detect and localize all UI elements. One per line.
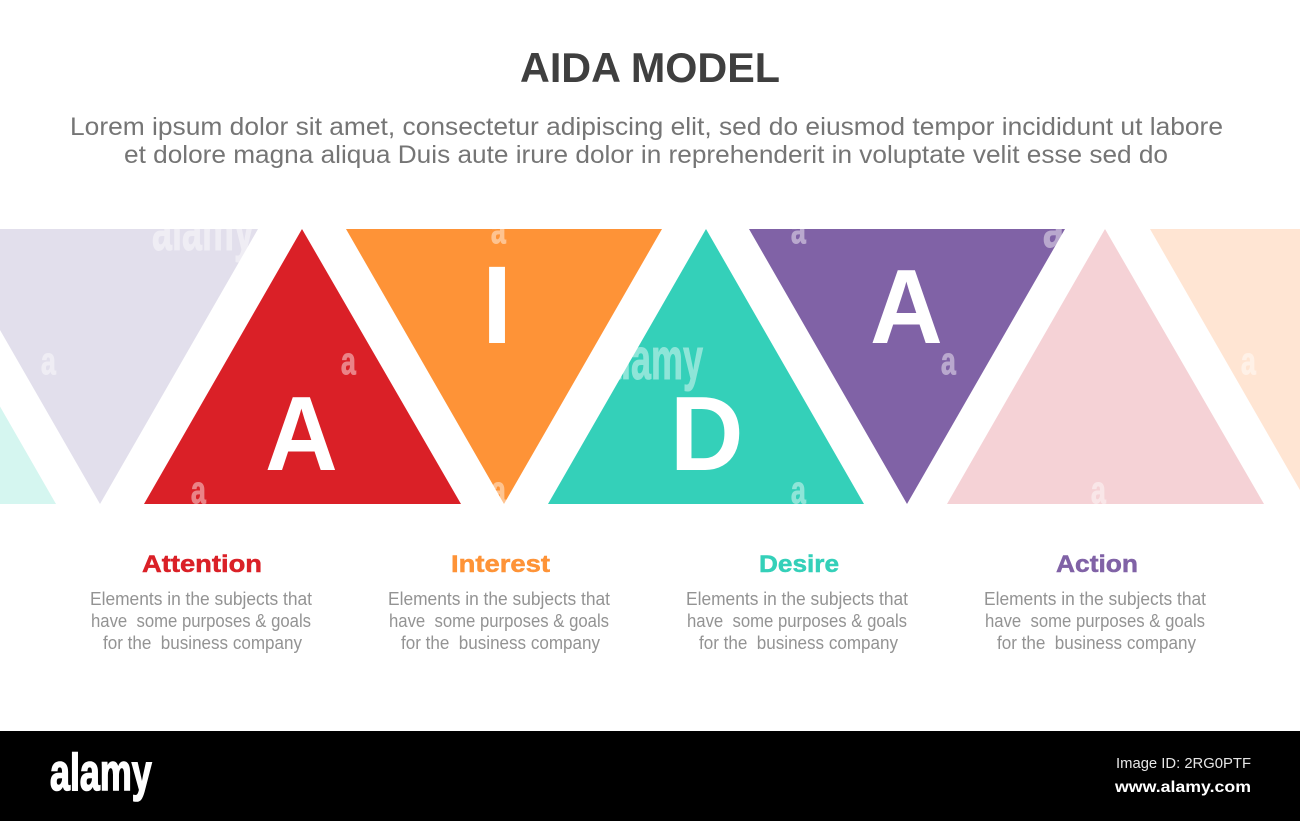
triangle: Attention letter A: [144, 229, 461, 504]
footer logo: alamy: [50, 745, 152, 802]
description: Attention: for the business company: [103, 633, 302, 653]
watermarks: a: [941, 339, 956, 382]
watermarks: a: [791, 208, 806, 251]
watermarks: a: [491, 468, 506, 511]
title: AIDA MODEL: [520, 44, 780, 91]
description: Desire: [686, 589, 908, 653]
watermarks: a: [1091, 468, 1106, 511]
triangle: Action letter A: [749, 229, 1065, 504]
footer bar: [0, 731, 1300, 821]
heading: Desire: Desire: [759, 551, 839, 578]
description: Action: have some purposes & goals: [985, 611, 1205, 631]
heading: Interest: Interest: [451, 551, 550, 578]
column: Attention: [90, 551, 312, 653]
description: Attention: [90, 589, 312, 653]
watermarks: a: [1043, 203, 1064, 258]
watermarks: a: [191, 468, 206, 511]
triangle: Action letter A: A: [870, 247, 943, 366]
triangle band: [0, 229, 1300, 504]
triangle: Desire letter D: D: [670, 375, 743, 493]
description: Interest: [388, 589, 610, 653]
description: Action: [984, 589, 1206, 653]
watermarks: alamy: [152, 198, 254, 263]
description: Desire: Elements in the subjects that: [686, 589, 908, 609]
intro text: [70, 113, 1223, 169]
column: Action: [984, 551, 1206, 653]
heading: Attention: Attention: [142, 551, 262, 578]
faded teal triangle: [0, 229, 56, 504]
website: www.alamy.com: [1114, 779, 1251, 796]
watermarks: a: [341, 339, 356, 382]
description: Action: Elements in the subjects that: [984, 589, 1206, 609]
column: Desire: [686, 551, 908, 653]
watermarks: a: [491, 208, 506, 251]
faded pink triangle: [947, 229, 1264, 504]
description: Interest: for the business company: [401, 633, 600, 653]
watermarks: a: [791, 468, 806, 511]
faded lavender triangle: [0, 229, 258, 504]
triangle: Attention letter A: A: [265, 374, 338, 493]
heading: Action: Action: [1056, 551, 1138, 578]
triangle: Interest letter I: I: [482, 244, 512, 367]
description: Desire: have some purposes & goals: [687, 611, 907, 631]
description: Attention: Elements in the subjects that: [90, 589, 312, 609]
intro text: et dolore magna aliqua Duis aute irure dolor in reprehenderit in voluptate velit esse sed do: [124, 141, 1168, 169]
watermarks: a: [41, 339, 56, 382]
description: Desire: for the business company: [699, 633, 898, 653]
watermarks: alamy: [601, 327, 703, 392]
description: Action: for the business company: [997, 633, 1196, 653]
faded peach triangle: [1150, 229, 1300, 504]
image id: Image ID: 2RG0PTF: [1116, 755, 1251, 772]
intro text: Lorem ipsum dolor sit amet, consectetur adipiscing elit, sed do eiusmod tempor incididunt ut labore: [70, 113, 1223, 141]
description: Attention: have some purposes & goals: [91, 611, 311, 631]
column: Interest: [388, 551, 610, 653]
watermarks: [41, 198, 1256, 511]
description: Interest: Elements in the subjects that: [388, 589, 610, 609]
description: Interest: have some purposes & goals: [389, 611, 609, 631]
triangle: Desire letter D: [548, 229, 864, 504]
watermarks: a: [1241, 339, 1256, 382]
triangle: Interest letter I: [346, 229, 662, 504]
